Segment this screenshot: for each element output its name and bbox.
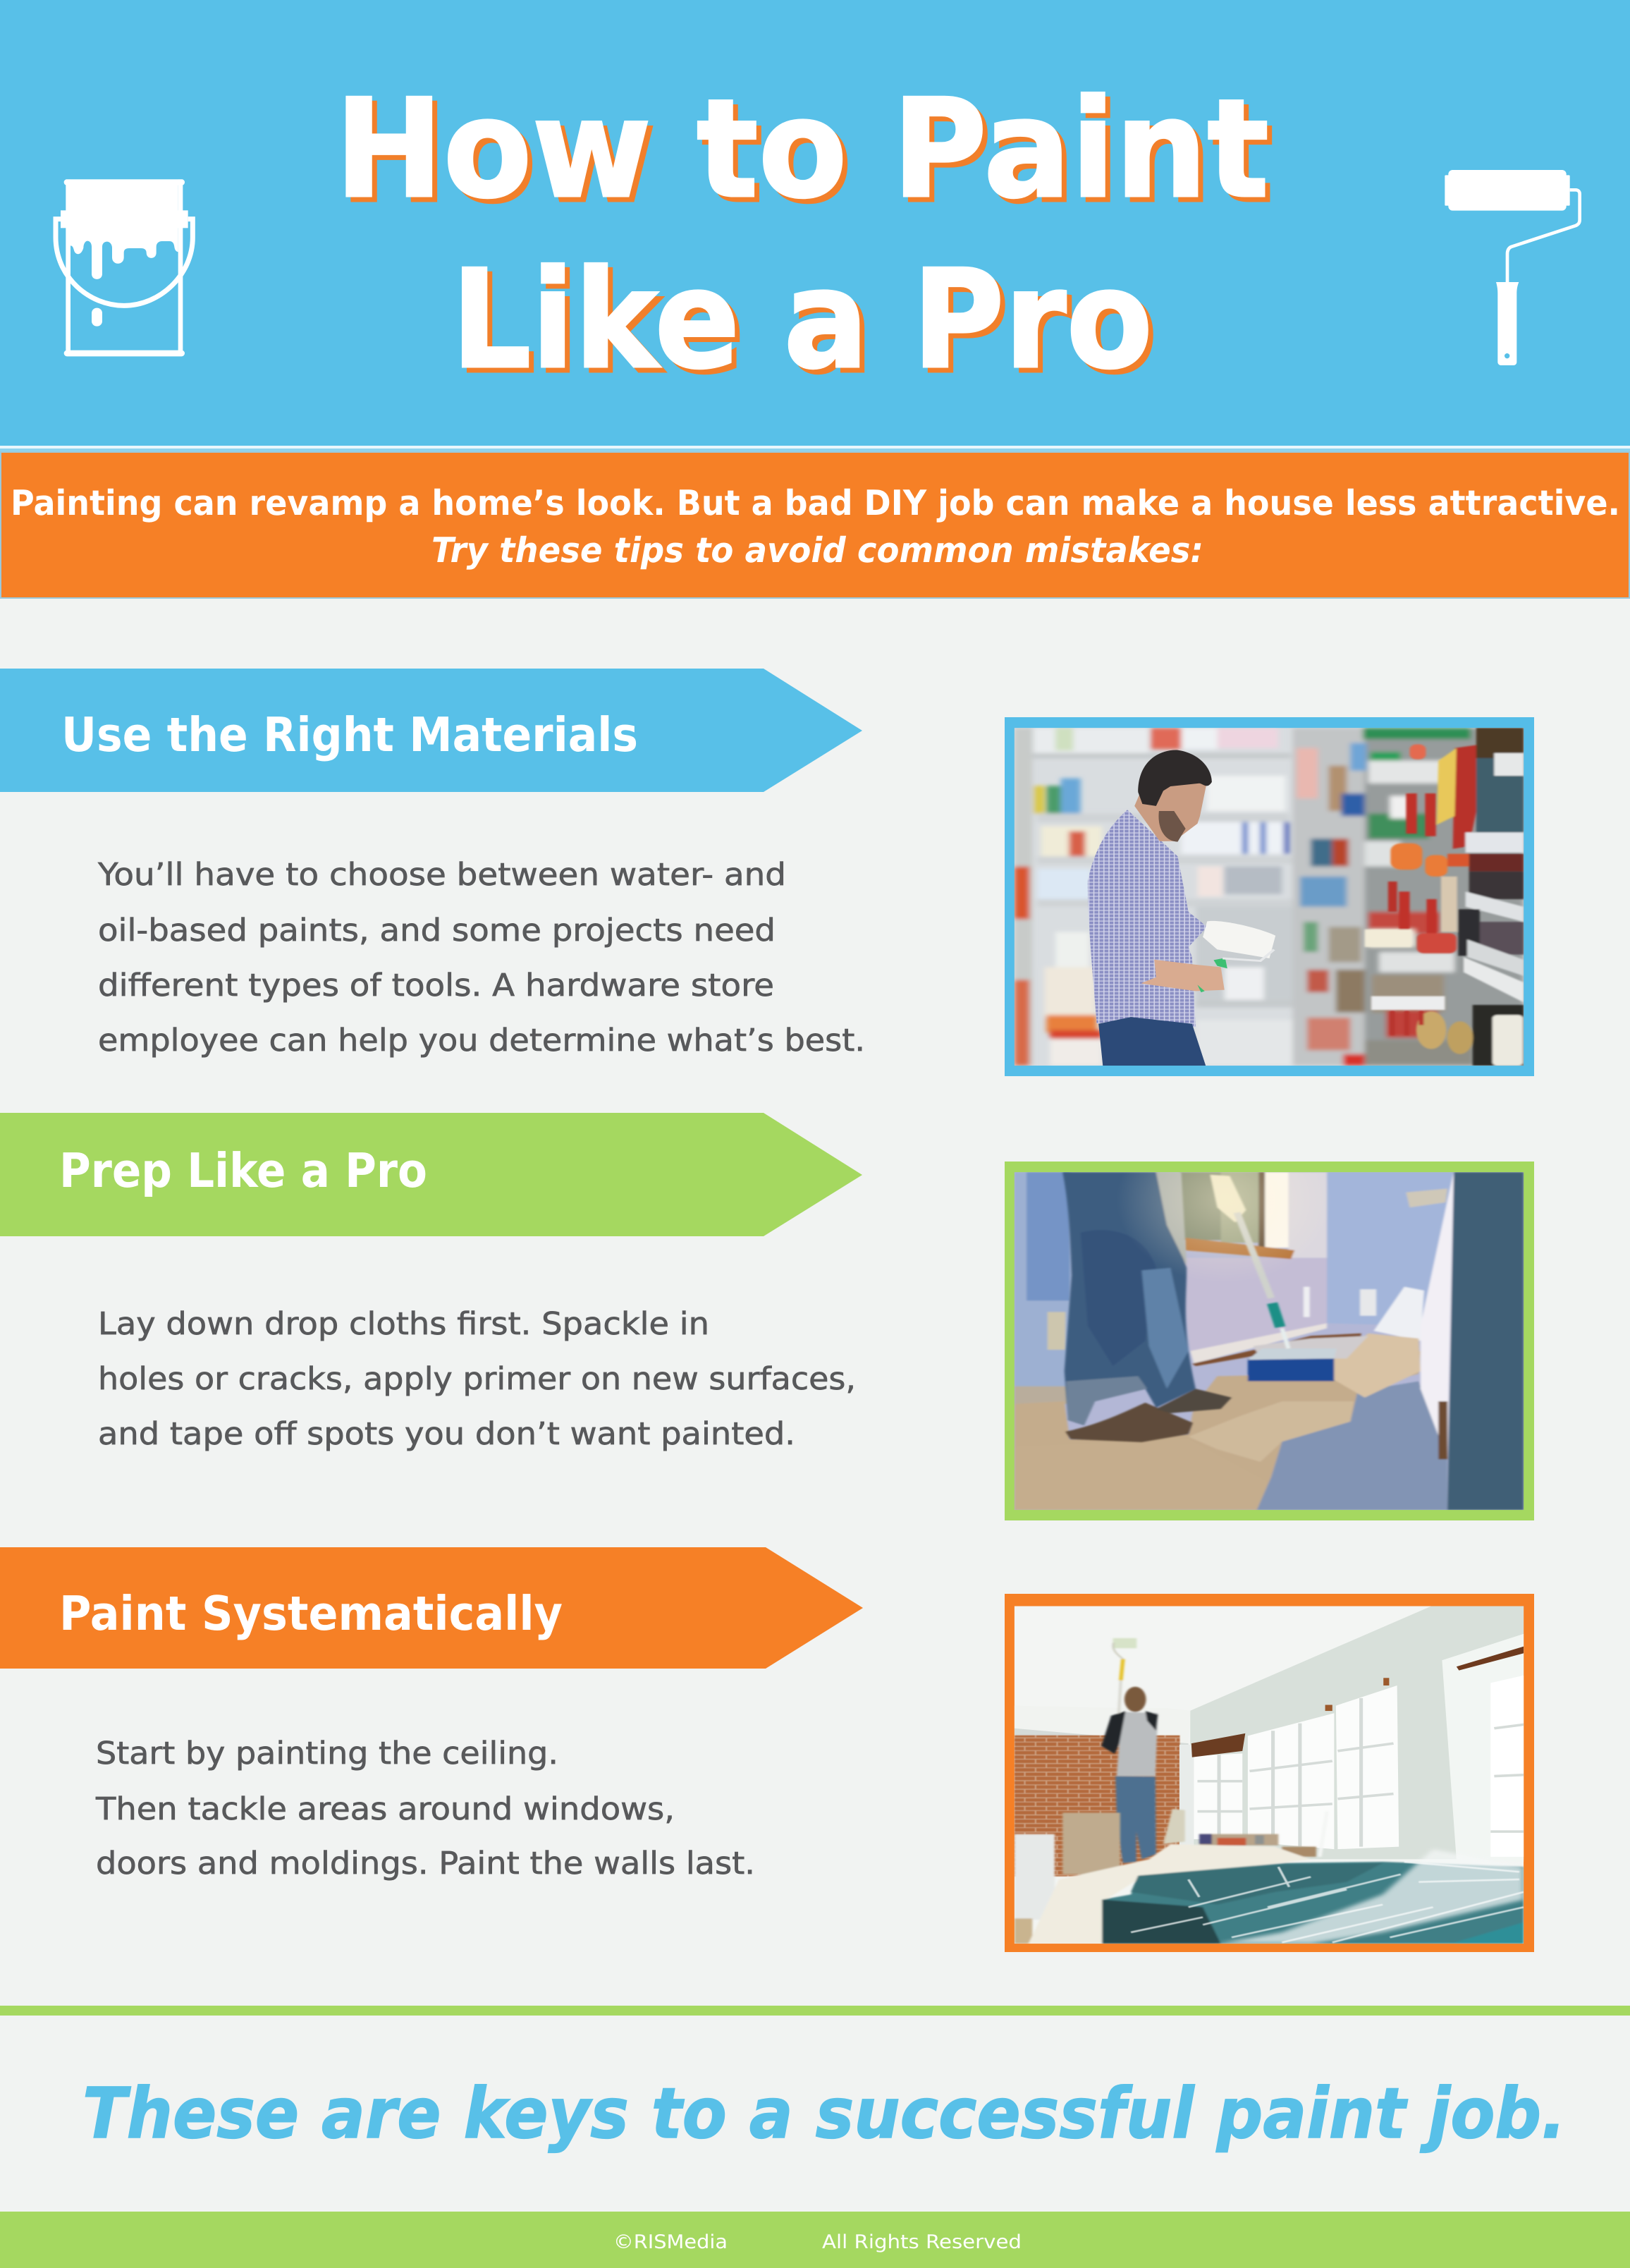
section 1 arrow heading <box>0 669 862 792</box>
header band <box>0 0 1630 453</box>
photo: person painting a ceiling in a room with covered furniture <box>1005 1594 1534 1952</box>
section 3 body text: Then tackle areas around windows, <box>95 1791 675 1827</box>
intro call to action: Try these tips to avoid common mistakes: <box>431 530 1203 571</box>
section 1 body text <box>97 857 865 1059</box>
divider line above closing statement <box>0 2006 1630 2016</box>
icon: paint roller <box>1445 170 1580 365</box>
section 3 body text: doors and moldings. Paint the walls last. <box>96 1846 755 1882</box>
section 2 body text <box>98 1306 856 1452</box>
section 2 body text: Lay down drop cloths first. Spackle in <box>98 1306 709 1342</box>
photo: painter on drop cloths in a blue room <box>1005 1162 1534 1520</box>
title line 2: Like a Pro <box>451 240 1153 399</box>
section 3 arrow heading: Paint Systematically <box>59 1586 563 1641</box>
section 3 body text <box>95 1736 755 1882</box>
section 1 body text: employee can help you determine what’s best. <box>98 1023 865 1059</box>
intro banner <box>0 451 1630 599</box>
person with roller <box>1101 1638 1158 1863</box>
title <box>335 70 1274 404</box>
footer band <box>0 2212 1630 2268</box>
plastic sheeting <box>1131 1849 1524 1944</box>
section 2 body text: holes or cracks, apply primer on new surfaces, <box>98 1361 856 1397</box>
room contents and covered furniture <box>1015 1809 1524 1944</box>
icon: paint can <box>56 179 192 356</box>
windows <box>1191 1634 1524 1862</box>
section 2 arrow heading: Prep Like a Pro <box>59 1143 427 1198</box>
photo: man choosing a roller in a hardware store <box>1005 717 1534 1076</box>
section 2 arrow heading <box>0 1113 862 1236</box>
section 2 body text: and tape off spots you don’t want painted. <box>98 1416 795 1452</box>
section 1 body text: oil-based paints, and some projects need <box>98 913 776 949</box>
title shadow line 1: How to Paint <box>340 75 1274 233</box>
copyright: ©RISMedia <box>613 2231 728 2253</box>
title shadow line 2: Like a Pro <box>456 245 1158 404</box>
section 1 body text: different types of tools. A hardware store <box>98 968 774 1004</box>
section 1 arrow heading: Use the Right Materials <box>61 707 638 762</box>
rights notice: All Rights Reserved <box>822 2231 1022 2253</box>
section 1 body text: You’ll have to choose between water- and <box>97 857 786 893</box>
section 3 arrow heading <box>0 1547 863 1669</box>
section 3 body text: Start by painting the ceiling. <box>96 1736 558 1772</box>
man <box>1088 750 1275 1066</box>
title line 1: How to Paint <box>335 70 1269 228</box>
trousers and shoes <box>1062 1172 1289 1442</box>
